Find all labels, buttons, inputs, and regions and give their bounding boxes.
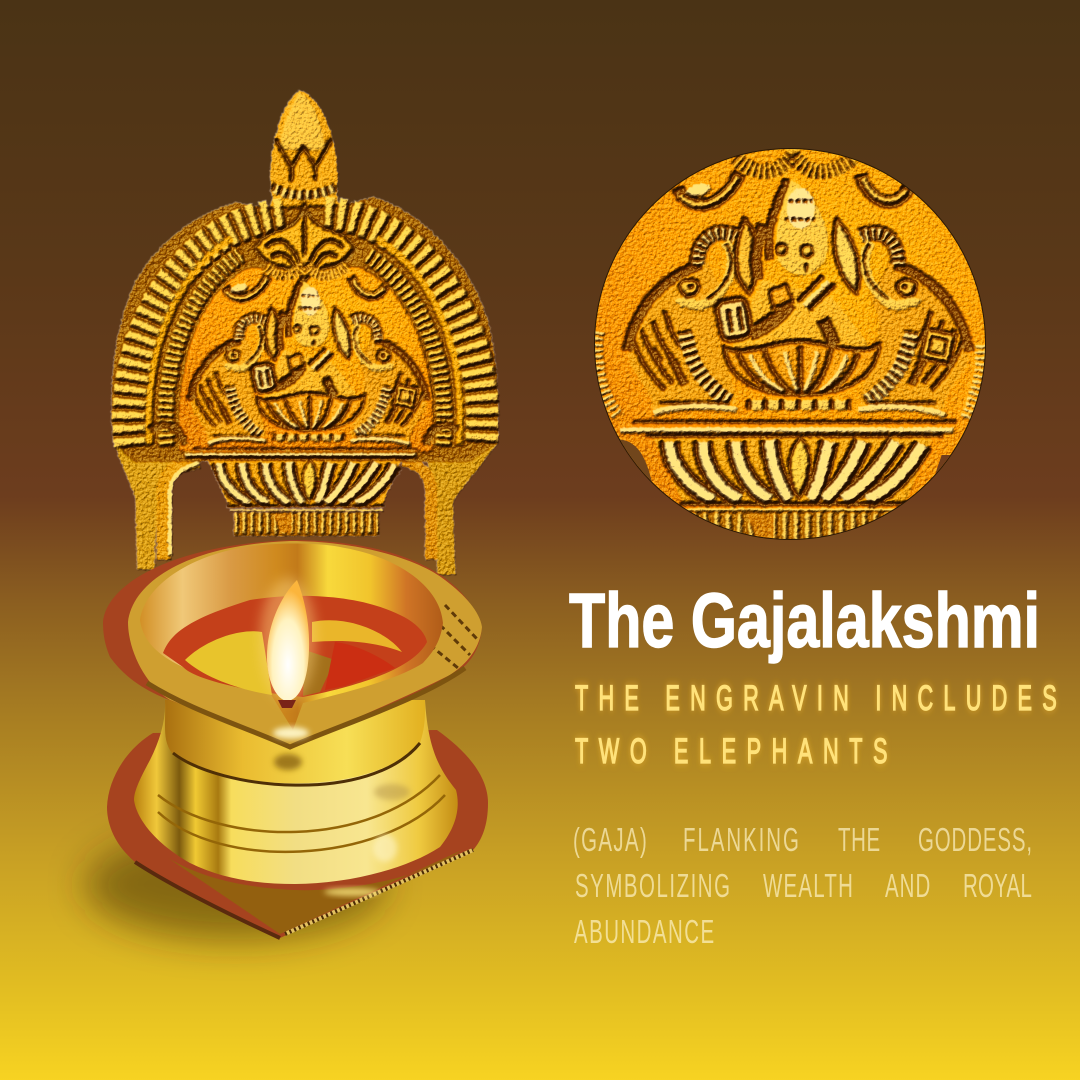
body description text [573, 821, 1032, 950]
lamp spout highlight [273, 727, 309, 739]
subtitle glowing text [575, 680, 1057, 771]
body description text: SYMBOLIZING [575, 867, 730, 904]
circle window cut-outs [620, 440, 950, 482]
lamp relief panel [185, 264, 427, 536]
body description text: ABUNDANCE [574, 913, 714, 950]
lamp gold lip band around bowl [128, 541, 482, 747]
lamp arch with radial ribs [111, 197, 499, 462]
lamp bowl inner wall [140, 544, 443, 730]
lamp oil surface [163, 596, 427, 697]
lamp photo: brass Gajalakshmi lamp [103, 90, 499, 938]
zoomed circular detail of the engraving [585, 140, 995, 550]
body description text: AND [885, 867, 930, 904]
body description text: (GAJA) [573, 821, 647, 858]
subtitle glowing text: TWO ELEPHANTS [575, 733, 887, 771]
lamp upper plate: finial, arch, relief, arms [111, 90, 499, 575]
body description text: ROYAL [963, 867, 1032, 904]
lamp finial [266, 90, 344, 212]
lamp cast shadow [85, 830, 385, 940]
body description text: WEALTH [763, 867, 853, 904]
lamp bowl rim [103, 540, 482, 747]
subtitle glowing text: THE ENGRAVIN INCLUDES [575, 680, 1057, 718]
body description text: GODDESS, [918, 821, 1032, 858]
lamp support arms [113, 443, 498, 575]
lamp flame [260, 578, 316, 708]
body description text: THE [838, 821, 880, 858]
body description text: FLANKING [683, 821, 799, 858]
lamp body [134, 700, 458, 884]
lamp base plate [107, 730, 488, 938]
